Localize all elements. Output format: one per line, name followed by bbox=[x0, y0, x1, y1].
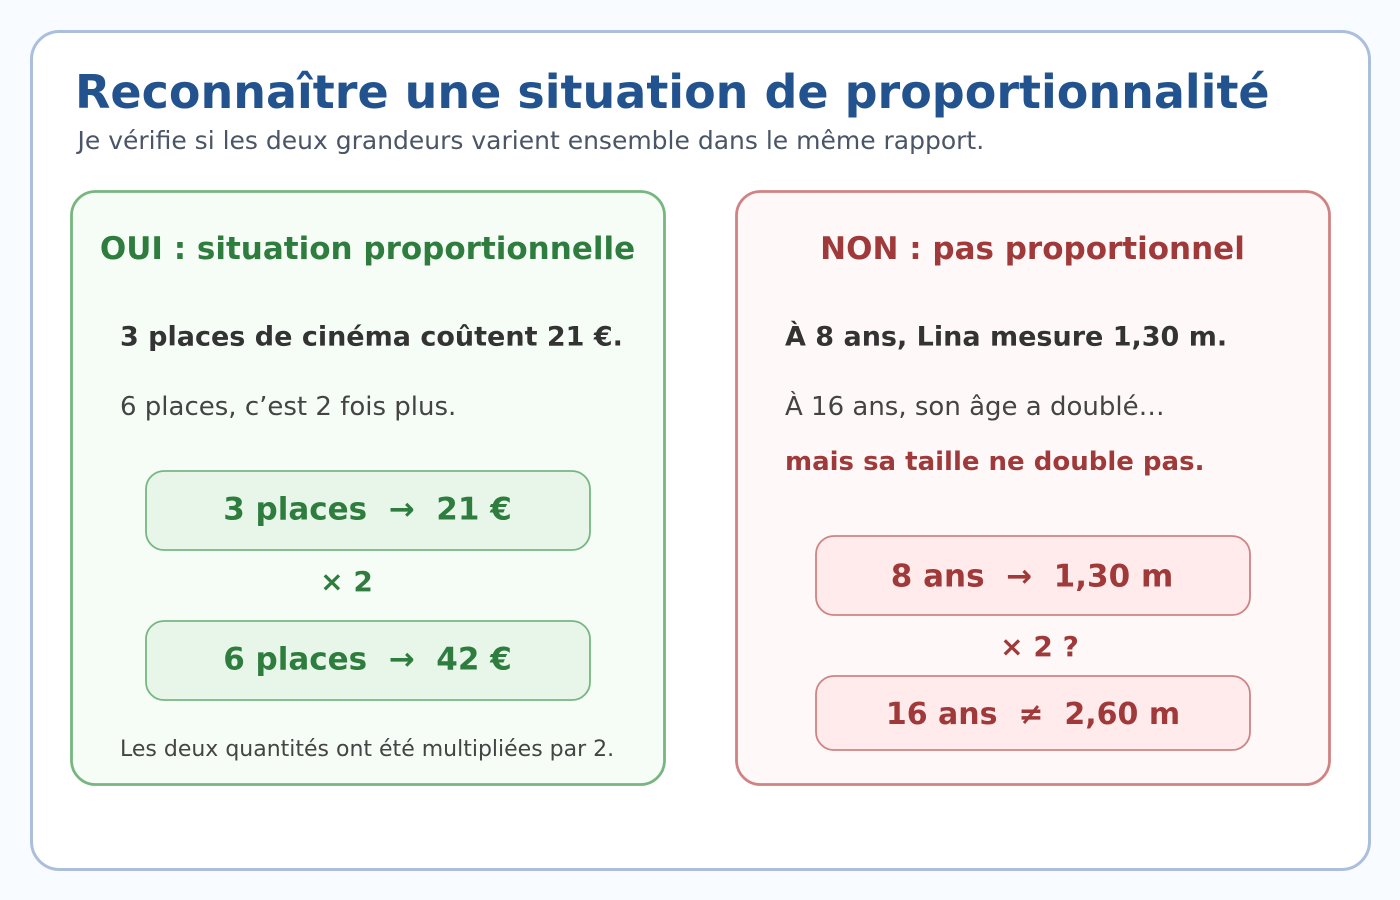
multiplier: times 2 question: × 2 ? bbox=[1000, 630, 1079, 663]
box: 6 places bbox=[146, 621, 590, 700]
box: 6 places: 6 places → 42 € bbox=[223, 642, 512, 678]
box: 8 ans bbox=[816, 536, 1250, 615]
panel background: NON bbox=[736, 192, 1330, 784]
panel background: OUI bbox=[72, 192, 664, 784]
box: 16 ans: 16 ans ≠ 2,60 m bbox=[886, 697, 1180, 732]
text: conclusion: Les deux quantités ont été multipliées par 2. bbox=[120, 737, 614, 762]
text: two times more: 6 places, c’est 2 fois plus. bbox=[120, 392, 456, 422]
box: 8 ans: 8 ans → 1,30 m bbox=[891, 558, 1173, 594]
multiplier: times 2: × 2 bbox=[320, 565, 373, 598]
heading: NON: NON : pas proportionnel bbox=[820, 231, 1245, 267]
box: 3 places: 3 places → 21 € bbox=[223, 492, 512, 528]
box: 16 ans bbox=[816, 676, 1250, 750]
panel: OUI bbox=[72, 192, 664, 784]
text: Lina statement: À 8 ans, Lina mesure 1,30 m. bbox=[785, 320, 1227, 352]
text: age doubled: À 16 ans, son âge a doublé… bbox=[785, 390, 1165, 422]
panel: NON bbox=[736, 192, 1330, 784]
subtitle: Je vérifie si les deux grandeurs varient ensemble dans le même rapport. bbox=[76, 126, 984, 155]
text: cinema statement: 3 places de cinéma coûtent 21 €. bbox=[120, 322, 623, 352]
text: height does not double: mais sa taille ne double pas. bbox=[785, 447, 1204, 477]
heading: OUI: OUI : situation proportionnelle bbox=[100, 231, 635, 267]
box: 3 places bbox=[146, 471, 590, 550]
title: Reconnaître une situation de proportionnalité bbox=[75, 65, 1270, 119]
